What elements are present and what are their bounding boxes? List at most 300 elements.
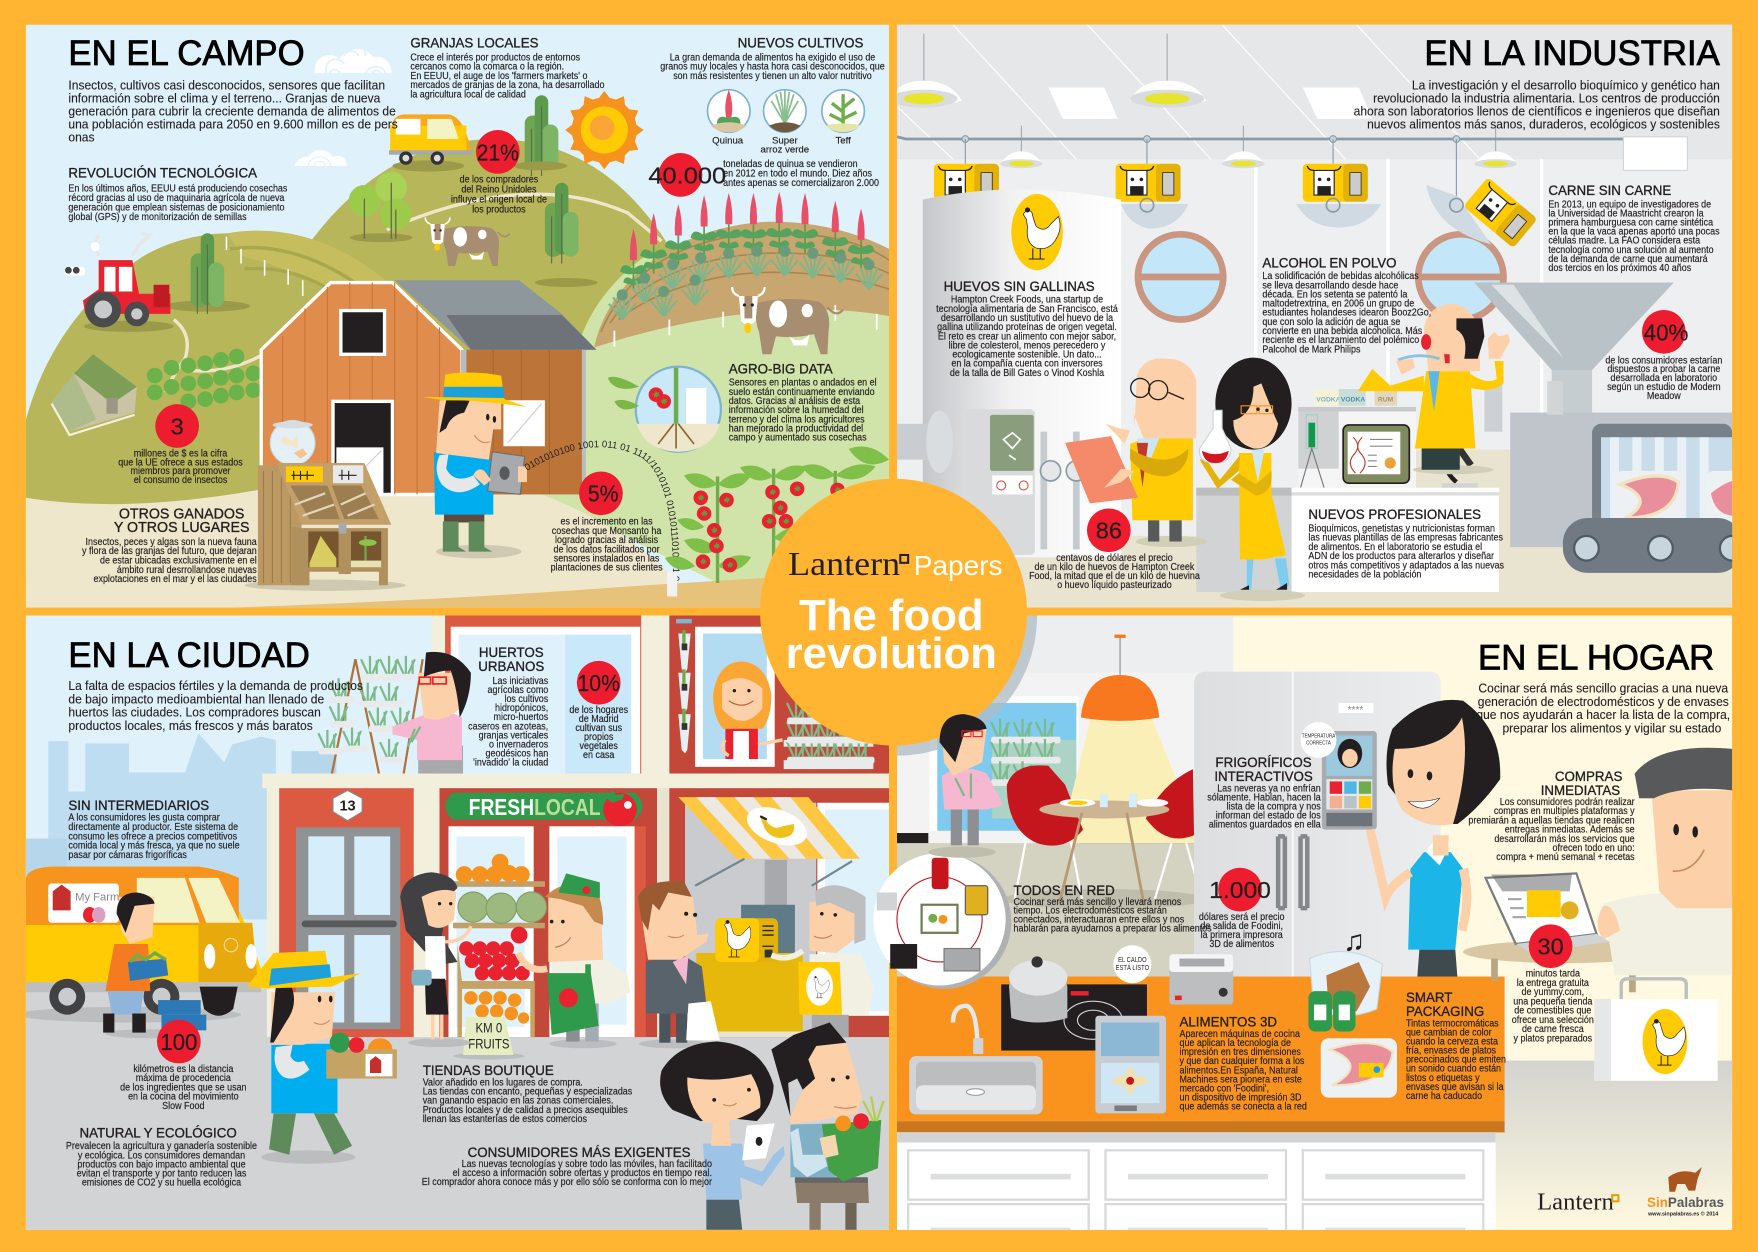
alcohol en polvo text: se lleva desarrollando desde hace xyxy=(1262,280,1398,290)
alimentos 3d text: que aplican la tecnología de xyxy=(1179,1038,1291,1048)
stat text: 100: de los ingredientes que se usan xyxy=(120,1082,247,1093)
stat: 3: 3 xyxy=(171,413,184,439)
sin intermediarios heading: SIN INTERMEDIARIOS xyxy=(68,798,209,813)
barn door xyxy=(333,401,392,494)
vegetable rows xyxy=(147,349,261,409)
stat: 100: 100 xyxy=(160,1028,197,1055)
logo lantern papers: Lantern xyxy=(788,545,900,583)
door number 13: 13 xyxy=(339,799,356,815)
microscope xyxy=(1442,428,1478,489)
woman in window xyxy=(713,661,783,759)
ciudad intro: La falta de espacios fértiles y la demanda de productos xyxy=(68,679,363,693)
badge title: revolution xyxy=(786,629,997,678)
campo intro: información sobre el clima y el terreno... Granjas de nueva xyxy=(68,91,380,106)
front bench xyxy=(1196,488,1499,592)
frigorificos interactivos text: sólamente. Hablan, hacen la xyxy=(1207,792,1322,803)
stat: 1.000 xyxy=(1209,868,1271,912)
huertos urbanos text: Las iniciativas xyxy=(493,676,549,686)
huertos urbanos text: geodésicos han xyxy=(486,748,548,759)
barn front wall xyxy=(261,283,462,494)
title: en la ciudad: EN LA CIUDAD xyxy=(68,637,310,675)
stat text: 5%: de los datos facilitados por xyxy=(554,544,660,554)
hydroponic rack right xyxy=(784,700,875,769)
campo intro: Insectos, cultivos casi desconocidos, sensores que facilitan xyxy=(68,78,385,93)
alimentos 3d text: impresión en tres dimensiones xyxy=(1179,1047,1301,1057)
carne sin carne heading: CARNE SIN CARNE xyxy=(1548,183,1671,198)
granjas locales heading: GRANJAS LOCALES xyxy=(410,35,539,51)
otros ganados text: explotaciones en el mar y el las ciudades xyxy=(93,574,257,584)
panel: en la industria xyxy=(888,25,1745,608)
ceiling xyxy=(897,25,1732,448)
huertos urbanos text: hidropónicos, xyxy=(495,703,548,713)
tiendas boutique text: Las tiendas con encanto, pequeñas y especializadas xyxy=(423,1086,633,1097)
cow on hill xyxy=(425,218,510,266)
natural y ecologico heading: NATURAL Y ECOLÓGICO xyxy=(79,1125,237,1140)
logo lantern papers xyxy=(788,545,1003,583)
speech bubble temperatura: CORRECTA xyxy=(1306,740,1331,747)
tomato plants xyxy=(665,446,889,596)
revolucion tecnologica text: generación que emplean sistemas de posicionamiento xyxy=(68,202,284,213)
hogar intro: preparar los alimentos y vigilar su estado xyxy=(1502,721,1721,736)
cooktop with pot xyxy=(1001,956,1147,1051)
granjas locales text: la agricultura local de calidad xyxy=(410,89,526,99)
sink and faucet xyxy=(909,1006,1043,1114)
alcohol en polvo text: reciente es el lanzamiento del polémico xyxy=(1262,335,1419,345)
center badge xyxy=(760,479,1027,746)
consumidores mas exigentes text: El comprador ahora conoce más y por ello sólo se conforma con lo mejor xyxy=(422,1177,712,1187)
young couple xyxy=(660,1022,883,1230)
stat: 100 xyxy=(157,1020,201,1063)
bubble caldo xyxy=(1113,945,1151,983)
huertos urbanos text: agrícolas como xyxy=(488,685,548,695)
bald scientist with clipboard xyxy=(1065,359,1208,547)
road xyxy=(166,194,661,392)
stat text: 3: el consumo de insectos xyxy=(134,475,228,485)
pendant lamp xyxy=(1081,635,1159,721)
stat text: 40.000: toneladas de quinua se vendieron xyxy=(723,159,858,169)
agro big data text: terreno y del clima los agricultores xyxy=(729,414,865,424)
carne sin carne text: tecnología como una solución al aumento xyxy=(1548,245,1714,255)
consumidores mas exigentes text: el acceso a información sobre ofertas y productos en tiempo real. xyxy=(453,1168,712,1178)
revolucion tecnologica text: récord gracias al uso de maquinaria agrícola de nueva xyxy=(68,193,285,203)
crop icon: super arroz verde xyxy=(764,90,806,132)
frigorificos interactivos text: Las neveras ya no enfrían xyxy=(1217,783,1321,794)
agro big data text: campo y aumentado sus cosechas xyxy=(729,432,867,443)
stat text: 86: centavos de dólares el precio xyxy=(1056,553,1173,563)
stat text: 86: de un kilo de huevos de Hampton Creek xyxy=(1035,562,1195,572)
hill left xyxy=(26,233,303,583)
skyline xyxy=(26,733,276,919)
farmer with tablet xyxy=(423,372,527,558)
cow in meadow xyxy=(732,287,843,354)
icon: cloud small xyxy=(295,150,347,166)
produce shelves xyxy=(453,854,547,928)
campo intro: onas xyxy=(68,130,95,145)
frigorificos interactivos text: lista de la compra y nos xyxy=(1227,801,1321,812)
logo sinpalabras: www.sinpalabras.es © 2014 xyxy=(1647,1210,1718,1217)
crop labels: arroz verde xyxy=(760,144,809,155)
huevos sin gallinas heading: HUEVOS SIN GALLINAS xyxy=(944,279,1095,294)
stat text: 3: millones de $ es la cifra xyxy=(134,448,228,458)
otros ganados heading: OTROS GANADOS xyxy=(119,506,245,523)
nuevos cultivos text: granos muy locales y hasta hora casi desconocidos, que xyxy=(660,61,885,72)
stat text: 21%: del Reino Unidoles xyxy=(461,184,537,195)
huevos sin gallinas text: tecnología alimentaria de San Francisco, está xyxy=(936,304,1119,314)
panel: en el campo xyxy=(26,24,890,608)
stat: 5%: 5% xyxy=(588,481,619,507)
huertos urbanos text: granjas verticales xyxy=(479,730,549,740)
nuevos profesionales text: las nuevas plantillas de las empresas fabricantes xyxy=(1308,532,1503,543)
stat text: 30: y platos preparados xyxy=(1513,1033,1592,1043)
smart packaging heading: PACKAGING xyxy=(1406,1004,1484,1019)
stat: 86: 86 xyxy=(1096,518,1122,544)
consumidores mas exigentes heading: CONSUMIDORES MÁS EXIGENTES xyxy=(468,1145,691,1160)
compras inmediatas text: ofrecen todo en uno: xyxy=(1553,843,1635,853)
agro big data text: datos. Gracias al análisis de esta xyxy=(729,396,861,406)
nuevos profesionales text: de alimentos. En el laboratorio se estudia el xyxy=(1308,542,1482,552)
panel: en el hogar xyxy=(897,616,1732,1252)
compras inmediatas text: compra + menú semanal + recetas xyxy=(1496,852,1635,862)
binary data arc: 0101010100 1001 011 01 1111/1010101 01010111010101 010 xyxy=(524,440,680,581)
insect hutch xyxy=(244,463,406,591)
stat text: 30: una pequeña tienda xyxy=(1513,996,1593,1006)
lower floor facades xyxy=(267,788,889,1037)
pot xyxy=(1009,956,1067,1022)
barn xyxy=(261,280,596,494)
natural y ecologico text: Prevalecen la agricultura y ganadería sostenible xyxy=(66,1141,257,1151)
binary data arc xyxy=(524,440,680,581)
compras inmediatas text: entregas inmediatas. Además se xyxy=(1505,824,1635,835)
street xyxy=(26,989,889,1230)
tiendas boutique text: van ganando espacio en las zonas comerciales. xyxy=(423,1095,613,1106)
floor xyxy=(897,450,1732,608)
fridge dispenser stars: **** xyxy=(1348,705,1363,716)
stat text: 86: o huevo líquido pasteurizado xyxy=(1057,580,1172,590)
stat: 21% xyxy=(476,130,520,174)
huevos sin gallinas text: El reto es crear un alimento con mejor sabor, xyxy=(938,331,1116,341)
huertos urbanos text: o invernaderos xyxy=(489,739,549,750)
panel: en la ciudad xyxy=(17,616,889,1230)
crop icon: teff xyxy=(822,90,864,132)
agro big data text: suelo están continuamente enviando xyxy=(729,387,875,397)
todos en red text: Cocinar será más sencillo y llevará menos xyxy=(1014,896,1182,907)
compras inmediatas text: premiarán a aquellas tiendas que realicen xyxy=(1468,815,1635,825)
man at laptop xyxy=(1598,748,1732,975)
dining set xyxy=(1007,765,1202,903)
huertos urbanos heading: URBANOS xyxy=(478,659,544,674)
nuevos profesionales text: otros más competitivos y adaptados a las nuevas xyxy=(1308,560,1504,570)
carne sin carne text: dos tercios en los próximos 40 años xyxy=(1548,263,1692,273)
stat text: 3: que la UE ofrece a sus estados xyxy=(118,457,243,467)
bottles vodka rum: RUM xyxy=(1378,396,1394,403)
icon: sensor plant xyxy=(608,367,721,452)
stat: 10%: 10% xyxy=(578,670,620,696)
hogar intro: generación de electrodomésticos y de envases xyxy=(1478,695,1729,709)
icon: fish bowl xyxy=(270,420,315,465)
alcohol en polvo text: estudiantes holandeses idearon Booz2Go, xyxy=(1262,307,1431,318)
conveyor belt xyxy=(1563,518,1745,573)
smart packaging text: Tintas termocromáticas xyxy=(1406,1018,1499,1028)
badge title: The food xyxy=(799,591,984,640)
huevos sin gallinas text: ecologicamente sostenible. Un dato... xyxy=(952,349,1102,360)
alimentos 3d text: y que dan cualquier forma a los xyxy=(1179,1056,1305,1066)
compras inmediatas heading: COMPRAS xyxy=(1555,769,1622,784)
frigorificos interactivos text: alimentos guardados en ella xyxy=(1209,819,1322,829)
carne sin carne text: En 2013, un equipo de investigadores de xyxy=(1548,199,1711,209)
granjas locales text: cercanos como la comarca o la región. xyxy=(410,61,564,72)
smart packaging text: que cambian de color xyxy=(1406,1027,1492,1038)
gray rim behind center circle xyxy=(757,475,1037,756)
tiendas boutique text: Valor añadido en los lugares de compra. xyxy=(423,1077,583,1087)
stat text: 30: minutos tarda xyxy=(1526,968,1581,979)
overhead rail xyxy=(897,136,1687,202)
stat text: 21%: los productos xyxy=(472,204,526,215)
fridge handles xyxy=(1278,836,1307,908)
cabinets xyxy=(897,1132,1496,1252)
stat text: 100: Slow Food xyxy=(162,1101,204,1111)
stat text: 10%: de los hogares xyxy=(569,705,628,715)
agro big data text: han mejorado la productividad del xyxy=(729,423,863,434)
van man with crate xyxy=(103,892,191,1038)
stat: 10% xyxy=(577,661,621,705)
alimentos 3d text: Machines sera pionera en este xyxy=(1179,1074,1302,1084)
stat text: 5%: cosechas que Monsanto ha xyxy=(552,526,662,536)
huertos urbanos text: los cultivos xyxy=(504,694,549,704)
meat on conveyor xyxy=(1614,471,1740,527)
meat package xyxy=(1321,1038,1397,1098)
stat text: 40.000: en 2012 en todo el mundo. Diez años xyxy=(723,168,872,179)
agro big data heading: AGRO-BIG DATA xyxy=(729,361,834,376)
stat text: 21%: de los compradores xyxy=(460,174,539,185)
blue crates xyxy=(158,1000,206,1030)
speech bubble temperatura xyxy=(1301,722,1336,758)
icon: egg and hen xyxy=(1011,194,1063,270)
sin intermediarios text: consumo les ofrece a precios competitivos xyxy=(68,831,237,841)
nuevos profesionales text: Bioquímicos, genetistas y nutricionistas forman xyxy=(1308,523,1495,534)
man with grocery bag xyxy=(771,1022,883,1230)
stat text: 5%: logrado gracias al análisis xyxy=(555,535,658,545)
alcohol en polvo heading: ALCOHOL EN POLVO xyxy=(1262,255,1397,270)
carne sin carne text: la Universidad de Maastricht crearon la xyxy=(1548,208,1704,219)
stat text: 5%: es el incremento en las xyxy=(561,516,653,527)
nuevos cultivos heading: NUEVOS CULTIVOS xyxy=(738,35,863,51)
awning xyxy=(678,797,860,886)
icon: cloud large xyxy=(314,49,392,73)
woman at fridge xyxy=(1370,700,1500,979)
green flask xyxy=(1301,415,1324,488)
nuevos profesionales text: ADN de los productos para alterarlos y diseñar xyxy=(1308,551,1494,561)
tractor xyxy=(65,233,174,332)
stat: 1.000: 1.000 xyxy=(1209,878,1271,904)
alimentos 3d text: un dispositivo de impresión 3D xyxy=(1179,1092,1302,1103)
granjas locales text: Crece el interés por productos de entornos xyxy=(410,52,580,63)
sign km0 fruits: KM 0 xyxy=(476,1021,502,1036)
back bench with lab items xyxy=(1298,389,1478,489)
bottles vodka rum: VODKA xyxy=(1341,396,1365,403)
natural y ecologico text: productos con bajo impacto ambiental que xyxy=(77,1159,246,1169)
alcohol en polvo text: década. En los setenta se patentó la xyxy=(1262,289,1408,300)
huertos urbanos text: caseros en azoteas, xyxy=(468,721,548,731)
alimentos 3d text: mercado con 'Foodini', xyxy=(1179,1083,1269,1093)
natural y ecologico text: y ecológica. Los consumidores demandan xyxy=(78,1150,245,1160)
seller with tomato xyxy=(511,873,630,1048)
alimentos 3d text: Aparecen máquinas de cocina xyxy=(1179,1029,1301,1039)
stat text: 86: Food, la mitad que el de un kilo de huevina xyxy=(1029,571,1201,581)
stat text: 10%: en casa xyxy=(583,750,615,760)
stat text: 40%: Meadow xyxy=(1647,391,1681,401)
sin intermediarios text: A los consumidores les gusta comprar xyxy=(68,812,220,823)
crop labels: Quinua xyxy=(712,136,744,147)
ciudad intro: huertos las ciudades. Los compradores buscan xyxy=(68,706,321,720)
industria intro: nuevos alimentos más sanos, duraderos, ecológicos y sostenibles xyxy=(1367,117,1720,132)
bottles vodka rum xyxy=(1314,389,1397,406)
stat text: 21%: influye el origen local de xyxy=(451,194,547,205)
stat text: 10%: de Madrid xyxy=(579,714,619,724)
cash machine xyxy=(741,905,795,953)
man with red glasses xyxy=(392,652,471,774)
stat text: 5%: plantaciones de sus clientes xyxy=(551,562,663,573)
ceiling lamps xyxy=(888,34,1517,168)
granjas locales text: En EEUU, el auge de los 'farmers markets' o xyxy=(410,71,587,81)
door number 13 xyxy=(333,790,362,821)
alimentos 3d text: que además se conecta a la red xyxy=(1179,1101,1307,1112)
frigorificos interactivos text: informan del estado de los xyxy=(1216,810,1321,821)
row of flowering plants xyxy=(620,192,875,289)
monitor dna xyxy=(1343,425,1409,483)
alcohol en polvo text: que con solo la adición de agua se xyxy=(1262,317,1400,327)
stat text: 40%: de los consumidores estarían xyxy=(1605,355,1722,365)
ciudad intro: productos locales, más frescos y más baratos xyxy=(68,719,313,733)
huevos sin gallinas text: en la compañía cuenta con inversores xyxy=(951,358,1103,369)
stat text: 5%: sensores instalados en las xyxy=(554,553,660,564)
fridge screen xyxy=(1322,731,1377,830)
table right xyxy=(1463,941,1665,992)
ciudad intro: de bajo impacto medioambiental han llenado de xyxy=(68,692,324,706)
stat text: 10%: propios xyxy=(584,732,614,742)
green cans xyxy=(1308,991,1355,1031)
stat: 5% xyxy=(579,471,623,515)
hydroponic ladder rack xyxy=(318,656,423,774)
logo sinpalabras: SinPalabras xyxy=(1647,1195,1724,1210)
alimentos 3d heading: ALIMENTOS 3D xyxy=(1179,1014,1277,1029)
natural y ecologico text: evitan el transporte y por tanto reducen las xyxy=(77,1168,247,1179)
stat text: 100: en la cocina del movimiento xyxy=(128,1091,239,1102)
stat text: 40%: según un estudio de Modern xyxy=(1607,382,1721,392)
man in kitchen xyxy=(928,714,1003,858)
barn side wall xyxy=(465,350,585,494)
huevos sin gallinas text: de la talla de Bill Gates o Vinod Koshla xyxy=(950,368,1105,378)
otros ganados text: de estar ubicadas exclusivamente en el xyxy=(100,555,257,566)
machine and pipes xyxy=(897,409,1086,555)
speech bubble temperatura: TEMPERATURA xyxy=(1302,733,1336,740)
nuevos profesionales text: necesidades de la población xyxy=(1308,569,1421,580)
taster scientist xyxy=(1358,304,1510,474)
shopping bag with egg xyxy=(1594,979,1718,1081)
alcohol en polvo text: convierte en una bebida alcoholica. Más xyxy=(1262,326,1423,336)
round windows xyxy=(1138,234,1503,320)
crop icon: quinua xyxy=(707,90,750,132)
stat text: 1.000: la primera impresora xyxy=(1201,930,1284,940)
smart packaging text: precocinados que emiten xyxy=(1406,1054,1506,1065)
hogar intro: Cocinar será más sencillo gracias a una nueva xyxy=(1478,681,1728,695)
smart packaging items xyxy=(1308,951,1397,1098)
stat text: 10%: cultivan sus xyxy=(575,723,622,733)
suit customer xyxy=(638,881,720,1048)
row of green plants xyxy=(609,246,882,320)
glass door xyxy=(296,827,400,1029)
stat text: 30: de comestibles que xyxy=(1514,1005,1591,1016)
stat: 30 xyxy=(1529,924,1572,968)
van with my farm sign xyxy=(17,867,261,1022)
otros ganados heading: Y OTROS LUGARES xyxy=(114,520,250,536)
lamp cone light xyxy=(1060,718,1202,843)
smart packaging text: envases que avisan si la xyxy=(1406,1082,1504,1092)
stat text: 40%: dispuestos a probar la carne xyxy=(1607,364,1720,374)
stat: 86 xyxy=(1087,508,1131,552)
bottles vodka rum: VODKA xyxy=(1316,396,1341,403)
hanging bottle planters xyxy=(678,630,691,753)
yellow counter xyxy=(696,953,803,1037)
carne sin carne text: células madre. La FAO considera esta xyxy=(1548,235,1701,246)
upper floor facade xyxy=(432,616,889,774)
farmer with box xyxy=(247,951,397,1164)
hanging cow boxes xyxy=(934,164,1538,248)
right floor xyxy=(1233,1061,1732,1230)
natural y ecologico text: emisiones de CO2 y su huella ecológica xyxy=(82,1177,242,1188)
logo lantern footer: Lantern xyxy=(1537,1189,1614,1216)
compras inmediatas text: compras en multiples plataformas y xyxy=(1494,806,1635,816)
industria intro: revolucionado la industria alimentaria. Los centros de producción xyxy=(1373,91,1720,106)
carne sin carne text: en la que la vaca apenas aportó una pocas xyxy=(1548,226,1720,237)
stat text: 30: la entrega gratuita xyxy=(1517,977,1590,988)
trees xyxy=(165,95,598,314)
carne sin carne text: primera hamburguesa con carne sintética xyxy=(1548,217,1714,228)
kitchen counter xyxy=(897,977,1505,1132)
revolucion tecnologica text: En los últimos años, EEUU está produciendo cosechas xyxy=(68,183,288,194)
frigorificos interactivos heading: FRIGORÍFICOS xyxy=(1215,755,1312,770)
smart packaging text: un sonido cuando están xyxy=(1406,1063,1501,1074)
light green meadow xyxy=(538,252,889,583)
floor shadow xyxy=(1003,889,1205,909)
logo lantern papers: Papers xyxy=(914,550,1003,581)
compras inmediatas text: Los consumidores podrán realizar xyxy=(1500,797,1635,807)
otros ganados text: Insectos, peces y algas son la nueva fauna xyxy=(86,537,258,547)
stat: 21%: 21% xyxy=(477,139,519,166)
nuevos cultivos text: La gran demanda de alimentos ha exigido el uso de xyxy=(670,52,875,63)
smart packaging text: listos o etiquetas y xyxy=(1406,1072,1480,1083)
food processor appliance xyxy=(1169,954,1233,1005)
van with my farm sign: My Farm xyxy=(75,891,119,903)
music notes: ♫ xyxy=(1343,926,1365,958)
huertos urbanos heading: HUERTOS xyxy=(479,645,544,660)
carne sin carne text: de la demanda de carne que aumentará xyxy=(1548,254,1708,264)
alcohol en polvo text: Palcohol de Mark Philips xyxy=(1262,344,1361,354)
industria intro: ahora son laboratorios llenos de científicos e ingenieros que diseñan xyxy=(1354,104,1720,119)
kitchen wall xyxy=(897,616,1233,843)
industria intro: La investigación y el desarrollo bioquímico y genético han xyxy=(1412,78,1720,93)
stat: 40.000 xyxy=(648,153,726,197)
sign km0 fruits xyxy=(453,1017,525,1059)
huevos sin gallinas text: gallina utilizando proteínas de origen vegetal. xyxy=(937,322,1117,332)
todos en red text: tiempo. Los electrodomésticos estarán xyxy=(1014,905,1167,916)
funnel and machinery xyxy=(1474,283,1732,547)
stat text: 10%: vegetales xyxy=(580,741,618,751)
title: en el campo: EN EL CAMPO xyxy=(68,35,305,73)
fridge xyxy=(1194,672,1441,979)
title: en el hogar: EN EL HOGAR xyxy=(1478,639,1714,677)
yellow box with hen xyxy=(715,918,778,962)
shop sign freshlocal xyxy=(445,790,642,826)
